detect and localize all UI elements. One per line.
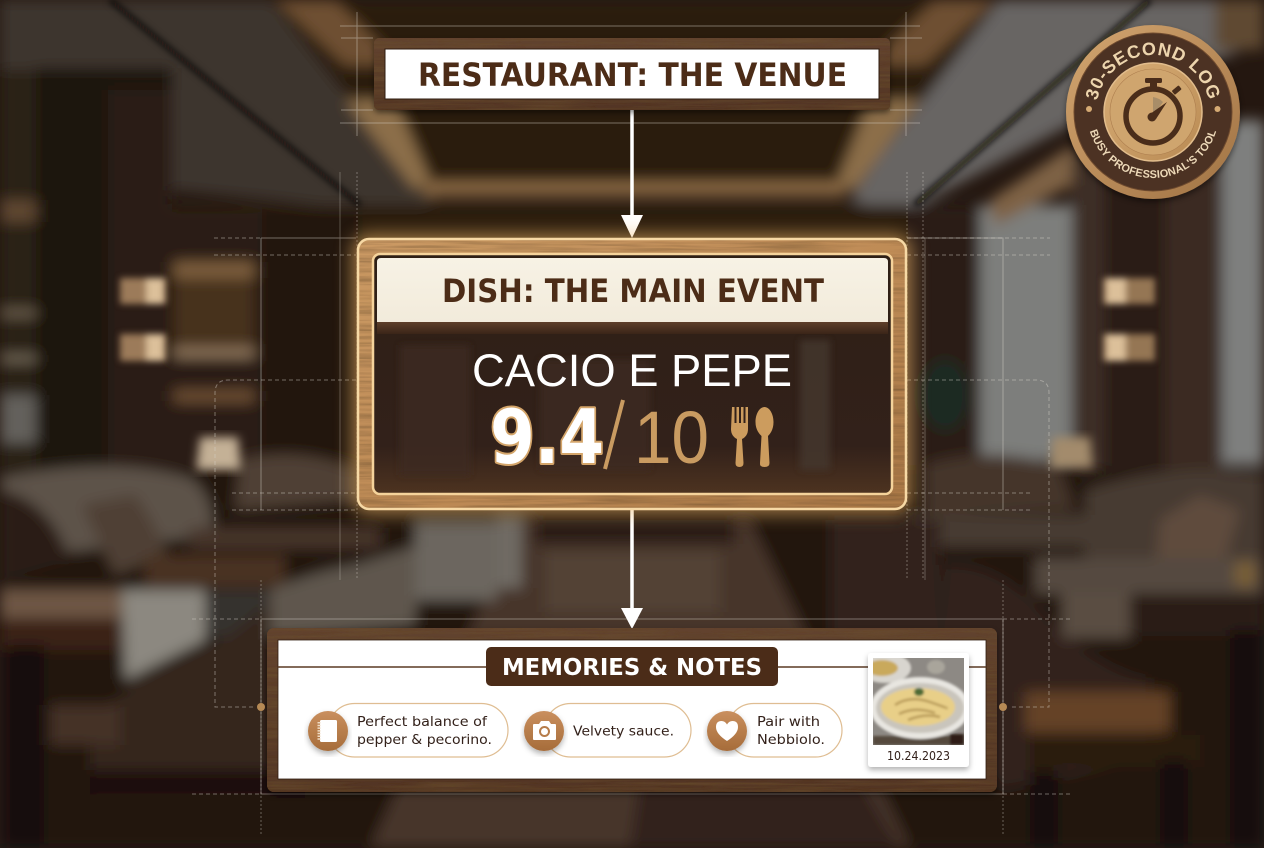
left shelves [174,212,264,470]
ceiling dark slots [110,0,360,205]
header band [377,258,888,322]
left chair [90,600,270,800]
badge dots [1086,106,1220,112]
score: 10 [634,396,709,479]
icon: camera [533,721,556,740]
left wall [0,70,38,470]
mid wall [170,205,990,555]
polaroid photo of pasta: 10.24.2023 [887,748,950,763]
note: velvety sauce [524,704,691,757]
floor [0,470,1264,848]
left table [0,590,205,618]
panel: dish main event [352,234,912,514]
panel: restaurant heading [374,38,890,110]
note: pair with nebbiolo: Pair with [757,714,820,730]
badge: 30-second log [1064,25,1242,202]
note: pair with nebbiolo [707,704,842,757]
icon: fork and spoon [731,407,774,467]
right tables [910,515,1110,547]
note: pepper and pecorino: Perfect balance of [357,714,488,730]
note: pair with nebbiolo: Nebbiolo. [757,732,825,748]
icon: stopwatch [1126,78,1182,143]
polaroid photo of pasta [859,653,970,767]
badge top text: 30-SECOND LOG [1086,42,1220,100]
right sofas [925,455,1075,515]
heading badge: memories: MEMORIES & NOTES [502,653,762,681]
ceiling: left grey plane [0,0,440,215]
lamps [196,437,241,470]
heading: dish: DISH: THE MAIN EVENT [442,272,824,310]
heading: restaurant: RESTAURANT: THE VENUE [418,56,847,94]
arrow: restaurant to dish [621,110,643,238]
ceiling: right grey plane [850,0,1264,215]
heading badge: memories [486,647,778,686]
left sofa [0,466,212,560]
blurred scene inside panel [400,340,830,475]
arrow: dish to memories [621,510,643,629]
panel: memories and notes [267,628,997,792]
dish name: CACIO E PEPE [472,345,792,396]
score: 9.4 [490,393,604,481]
right chair [940,565,1150,790]
score [490,393,709,481]
grey centre chairs [270,545,420,640]
measurement guide lines [192,12,1072,835]
ceiling: central coffer [270,0,1000,195]
note: velvety sauce: Velvety sauce. [573,724,674,740]
icon: heart [716,721,738,741]
note: pepper and pecorino [308,704,508,757]
badge bottom text: BUSY PROFESSIONAL'S TOOL [1090,129,1216,178]
icon: notebook [319,720,337,742]
connector dots [257,703,1007,711]
right wall: windows and pillar [908,205,983,465]
note: pepper and pecorino: pepper & pecorino. [357,732,492,748]
